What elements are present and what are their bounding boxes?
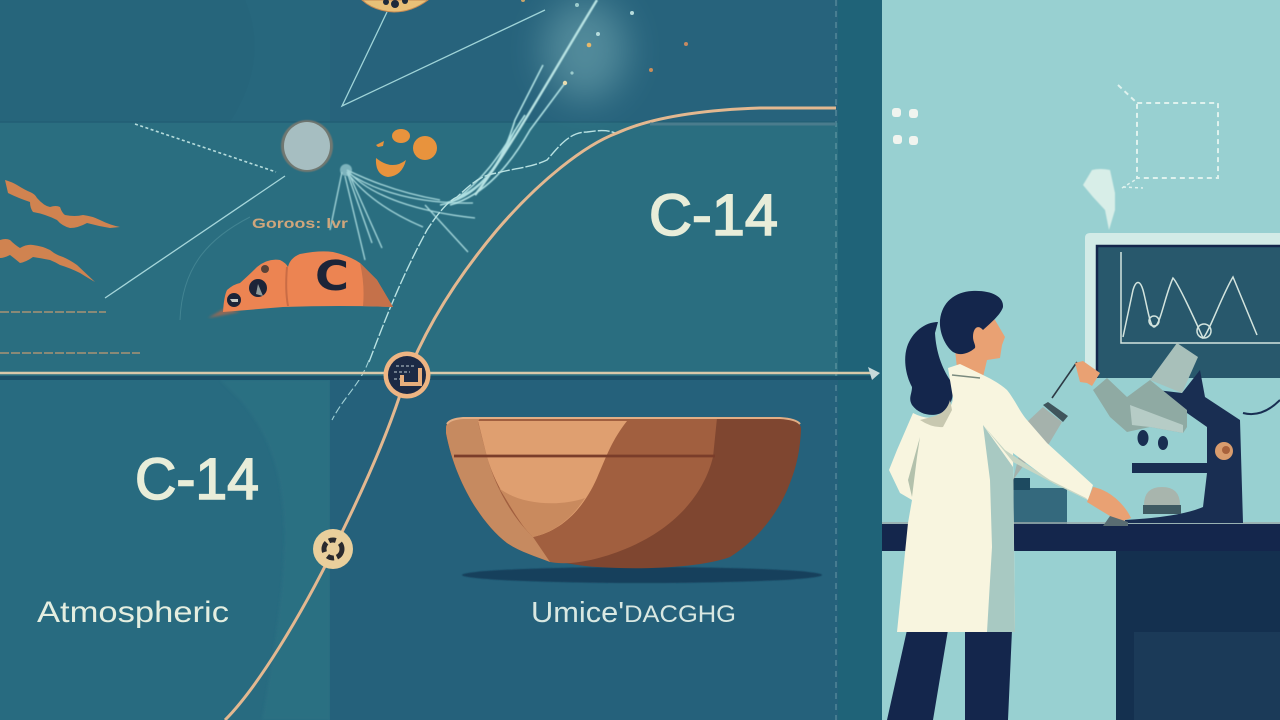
icon: particle at top edge	[362, 0, 428, 12]
icon: orange atom blobs	[376, 129, 437, 177]
illustration: scientist	[887, 291, 1131, 720]
icon: orange carbon mound	[180, 217, 393, 320]
marker: timeline node	[384, 352, 430, 398]
panel: dark teal background	[0, 0, 882, 720]
legs	[887, 630, 1012, 720]
bowl outer left tone	[446, 418, 550, 562]
dashed decay curve	[369, 131, 615, 362]
hand on bench	[1087, 487, 1131, 522]
heading: C-14 lower: C-14	[135, 447, 259, 512]
text: small tick lines	[0, 312, 140, 353]
label: carbon formation caption: Goroos: lvr	[252, 215, 349, 231]
bowl shadow	[462, 567, 822, 583]
icon: steam plume	[1083, 169, 1143, 230]
fan of particle trails	[330, 170, 475, 260]
panel: light lab background	[882, 0, 1280, 720]
bowl body	[446, 418, 801, 568]
chart: monitor wave	[1121, 252, 1280, 343]
ponytail	[905, 322, 953, 415]
label: Atmospheric: Atmospheric	[37, 596, 229, 629]
lab coat	[889, 364, 1093, 632]
axis: horizontal timeline	[0, 367, 880, 380]
rim and groove	[447, 418, 800, 424]
marker: curve node	[313, 529, 353, 569]
triangle lines	[342, 10, 545, 106]
label: bowl caption: Umice'DACGHG	[531, 597, 736, 629]
chart: S-curve radiocarbon line	[225, 108, 836, 720]
illustration: clay bowl	[446, 418, 822, 583]
heading: C-14 upper: C-14	[649, 183, 778, 248]
label: carbon letter C: C	[315, 252, 349, 300]
icons: dots upper lab wall	[892, 108, 918, 145]
illustration: microscope	[1093, 343, 1280, 523]
face and neck	[955, 315, 1005, 377]
bowl highlight	[478, 421, 627, 537]
illustration: background flask and box	[1013, 362, 1077, 525]
sparks	[521, 0, 688, 85]
dashed ray	[135, 124, 276, 172]
bowl left tone	[446, 418, 717, 563]
haze around ray	[543, 0, 627, 100]
thin ray to sphere	[105, 176, 285, 298]
illustration: monitor	[1085, 233, 1280, 378]
icon: dashed square	[1118, 85, 1218, 178]
diagram: cosmic ray lines	[105, 0, 688, 420]
icon: orange tree ring waves	[0, 180, 120, 282]
hair	[940, 291, 1003, 354]
illustration: bench	[882, 523, 1280, 720]
rising particle streaks	[440, 0, 597, 205]
hand on microscope	[1075, 361, 1100, 386]
icon: grey sphere	[281, 120, 333, 172]
glow point	[340, 164, 352, 176]
